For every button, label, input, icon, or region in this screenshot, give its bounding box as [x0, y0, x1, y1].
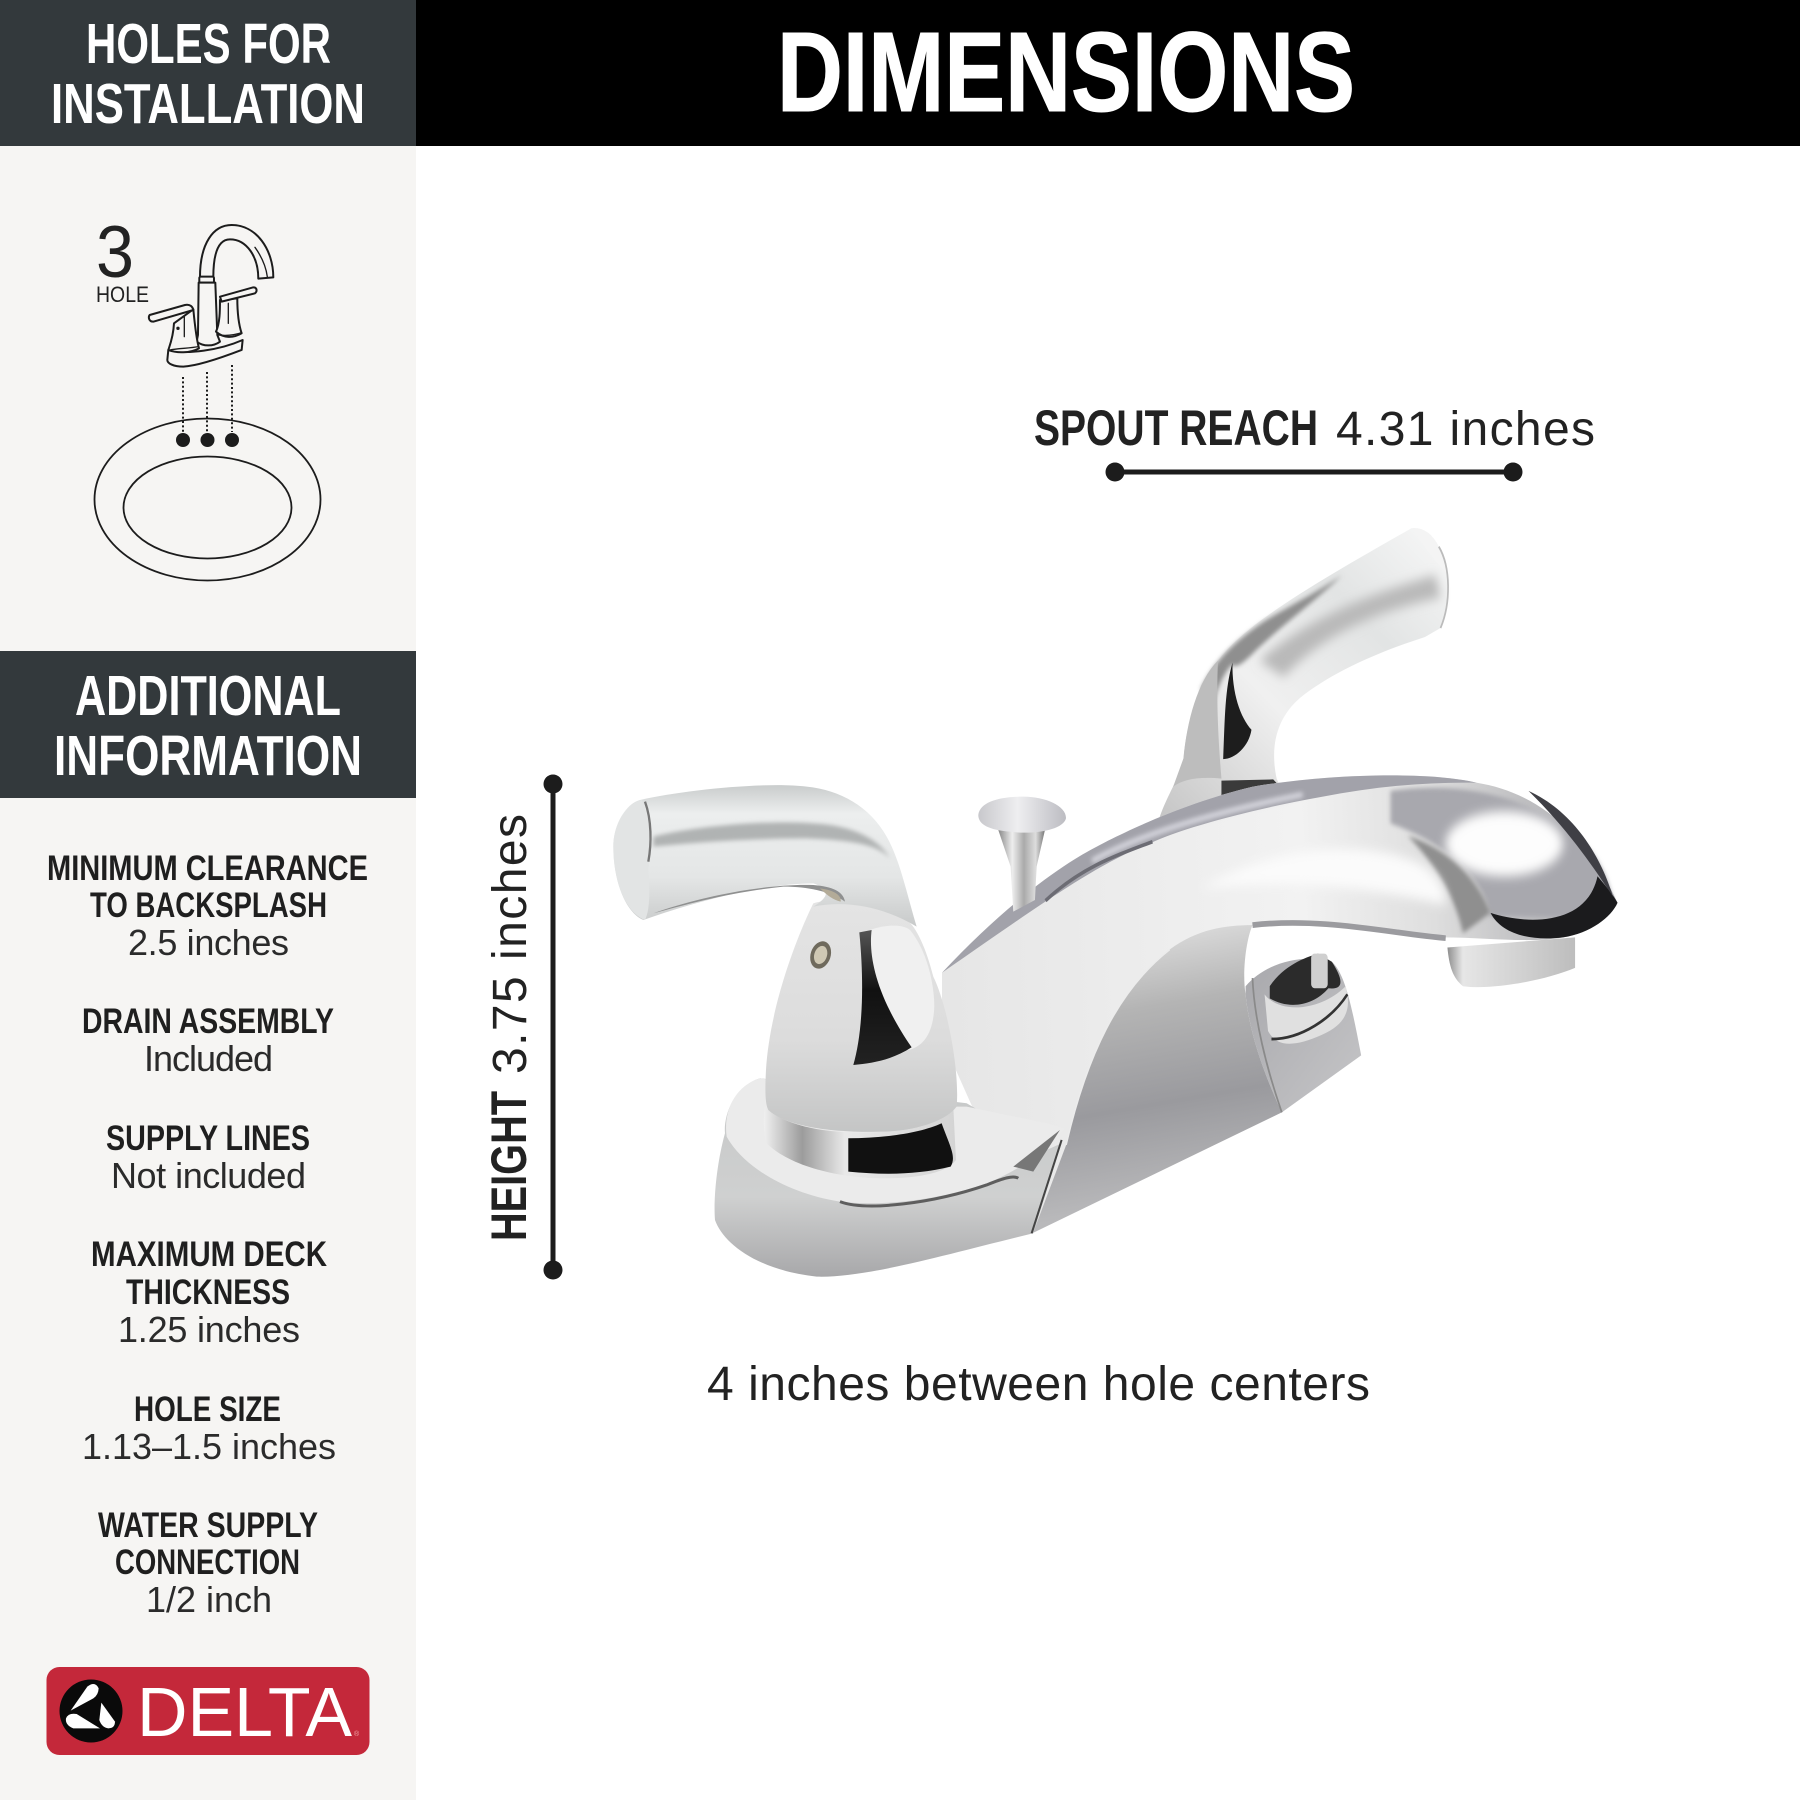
spec: water supply connection: WATER SUPPLY: [98, 1506, 318, 1545]
spec: hole size: HOLE SIZE: [134, 1390, 281, 1429]
arrow: spout reach measure line: [1106, 462, 1522, 482]
spec: supply lines: [106, 1119, 310, 1196]
icon: dotted drop lines: [183, 365, 232, 432]
header: holes for installation: [0, 0, 416, 146]
label: 3 hole: [96, 212, 149, 307]
spec: supply lines: Not included: [111, 1155, 306, 1196]
logo: delta: DELTA: [137, 1673, 352, 1751]
header: holes for installation: HOLES FOR: [86, 12, 331, 76]
dimension: height: HEIGHT: [481, 1091, 537, 1241]
spec: supply lines: SUPPLY LINES: [106, 1119, 310, 1158]
spec: drain assembly: Included: [144, 1038, 273, 1079]
label: 3 hole: HOLE: [96, 282, 149, 307]
faucet: body: [1033, 925, 1282, 1233]
spec: hole size: 1.13–1.5 inches: [82, 1426, 336, 1467]
dimension: spout reach: SPOUT REACH: [1034, 400, 1318, 456]
header: additional information: INFORMATION: [54, 724, 362, 788]
faucet: right-side parts: [942, 528, 1618, 1233]
icon: sink basin: [94, 418, 320, 580]
dimension: spout reach: 4.31 inches: [1336, 403, 1595, 456]
logo: delta: ®: [354, 1730, 360, 1738]
spec: drain assembly: DRAIN ASSEMBLY: [82, 1002, 334, 1041]
spec: hole size: [82, 1390, 336, 1467]
spec: minimum clearance to backsplash: TO BACKSPLASH: [90, 886, 327, 925]
icon: three holes: [176, 433, 239, 447]
text: hole spacing: 4 inches between hole centers: [707, 1358, 1370, 1411]
faucet: left-side parts: [613, 785, 1066, 1277]
faucet: rear handle: [1158, 528, 1448, 823]
faucet: drain stopper: [978, 797, 1066, 912]
spec: water supply connection: CONNECTION: [115, 1543, 300, 1582]
icon: faucet line drawing: [149, 225, 273, 367]
logo: delta: [46, 1667, 370, 1755]
arrow: height measure line: [544, 774, 562, 1280]
faucet: front handle: [613, 785, 957, 1178]
spec: water supply connection: 1/2 inch: [146, 1579, 272, 1620]
faucet: spout: [942, 775, 1618, 1233]
faucet: aerator: [1447, 937, 1575, 987]
label: 3 hole: 3: [96, 212, 134, 293]
icon: 3-hole faucet over sink diagram: [94, 212, 320, 580]
title: dimensions: DIMENSIONS: [777, 9, 1355, 135]
dimension: height: 3.75 inches: [484, 814, 537, 1074]
spec: maximum deck thickness: MAXIMUM DECK: [91, 1235, 327, 1274]
dimension: spout reach: [1034, 400, 1595, 482]
header: additional information: ADDITIONAL: [75, 664, 341, 728]
header: additional information: [0, 651, 416, 798]
spec: maximum deck thickness: [91, 1235, 327, 1350]
spec: minimum clearance to backsplash: MINIMUM CLEARANCE: [47, 849, 368, 888]
spec: water supply connection: [98, 1506, 318, 1620]
dimension: height: [481, 774, 562, 1280]
title: dimensions: [416, 0, 1800, 146]
spec: maximum deck thickness: 1.25 inches: [118, 1309, 300, 1350]
spec: minimum clearance to backsplash: 2.5 inches: [128, 922, 289, 963]
faucet: rear pedestal: [1246, 954, 1361, 1112]
spec: drain assembly: [82, 1002, 334, 1079]
faucet: deck plate: [715, 1078, 1065, 1277]
panel: sidebar background: [0, 146, 416, 1800]
spec: minimum clearance to backsplash: [47, 849, 368, 963]
header: holes for installation: INSTALLATION: [51, 72, 365, 136]
spec: maximum deck thickness: THICKNESS: [126, 1273, 290, 1312]
image: chrome faucet: [613, 528, 1618, 1277]
